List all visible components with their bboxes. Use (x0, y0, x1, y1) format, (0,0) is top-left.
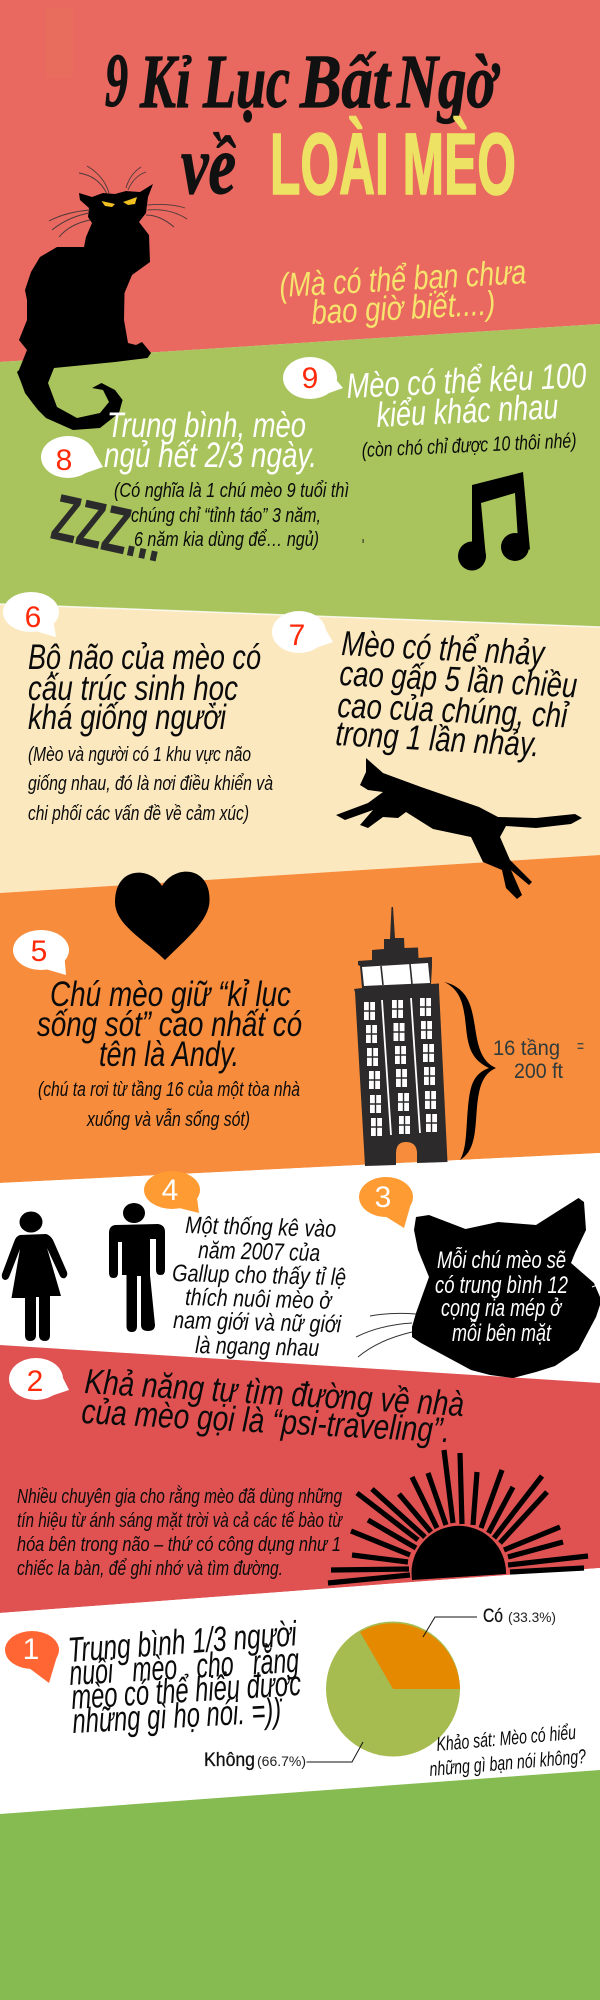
fact 4 text: thích nuôi mèo ở (185, 1284, 334, 1315)
fact 2 paragraph: Nhiều chuyên gia cho rằng mèo đã dùng những (17, 1485, 342, 1508)
fact 6 note: chi phối các vấn đề về cảm xúc) (28, 802, 249, 825)
subtitle (278, 253, 527, 332)
panel: fact 5 (13, 872, 584, 1166)
fact 6 note (28, 743, 273, 825)
fact 3 text: cọng ria mép ở (441, 1295, 563, 1322)
survey caption (429, 1722, 587, 1781)
fact 2 heading: Khả năng tự tìm đường về nhà (84, 1362, 465, 1424)
fact 6 heading: khá giống người (28, 698, 227, 737)
fact 2 heading: của mèo gọi là “psi-traveling”. (81, 1392, 451, 1450)
fact 7 heading: Mèo có thể nhảy (341, 624, 547, 673)
bubble 7: 7 (289, 619, 305, 652)
fact 7 heading (335, 624, 578, 764)
fact 5 heading: Chú mèo giữ “kỉ lục (50, 975, 291, 1014)
fact 4 text: nam giới và nữ giới (173, 1307, 342, 1338)
subtitle: (Mà có thể bạn chưa (278, 253, 527, 305)
floors label (493, 1036, 584, 1083)
panel: fact 4 (2, 1171, 346, 1362)
fact 5 note: (chú ta rơi từ tầng 16 của một tòa nhà (38, 1078, 300, 1101)
title: Ngờ (396, 40, 500, 124)
fact 2 paragraph: chiếc la bàn, để ghi nhớ và tìm đường. (17, 1557, 283, 1580)
title: 9 (105, 39, 128, 123)
bubble 5: 5 (31, 935, 47, 968)
bubble 8 (41, 436, 103, 478)
fact 2 heading (81, 1362, 465, 1450)
title (105, 39, 516, 213)
pie label: yes: Có (483, 1606, 503, 1627)
bubble 7 (272, 611, 333, 653)
fact 8 note: (Có nghĩa là 1 chú mèo 9 tuổi thì (114, 479, 349, 502)
bubble 1: 1 (23, 1633, 39, 1666)
title: Lục (202, 40, 290, 124)
icon: woman (2, 1212, 67, 1341)
bubble 1 (5, 1631, 59, 1683)
icon: building (354, 907, 448, 1166)
fact 2 paragraph (17, 1485, 343, 1580)
bubble 2 (9, 1358, 69, 1400)
floors label: 200 ft (514, 1060, 563, 1083)
panel: fact 2 (9, 1358, 588, 1583)
pie label: no: Không (204, 1750, 255, 1771)
fact 5 heading: tên là Andy. (99, 1035, 239, 1074)
fact 3 text (435, 1246, 568, 1347)
icon: ZZZ: ZZZ... (46, 479, 171, 576)
fact 7 heading: trong 1 lần nhảy. (335, 714, 540, 764)
panel: fact 9 (283, 356, 588, 570)
fact 1 text (67, 1614, 302, 1741)
fact 1 text: nuôi mèo cho rằng (68, 1641, 300, 1693)
bubble 6 (3, 592, 59, 637)
fact 9 heading (346, 356, 588, 435)
panel: fact 8 (41, 406, 349, 576)
icon: sun (328, 1450, 588, 1583)
fact 1 text: Trung bình 1/3 người (67, 1614, 299, 1670)
fact 6 heading (28, 638, 261, 737)
bubble 4: 4 (162, 1174, 178, 1207)
panel: fact 6 (3, 592, 273, 825)
fact 8 note: chúng chỉ “tỉnh táo” 3 năm, (131, 504, 321, 527)
pie label: no (204, 1750, 306, 1771)
fact 8 heading (104, 406, 317, 475)
fact 6 note: (Mèo và người có 1 khu vực não (28, 743, 251, 766)
fact 8 heading: ngủ hết 2/3 ngày. (104, 436, 317, 475)
bubble 8: 8 (56, 444, 72, 477)
pie label: no: (66.7%) (257, 1753, 306, 1769)
panel: fact 3 (356, 1177, 600, 1378)
fact 3 text: mỗi bên mặt (452, 1319, 552, 1347)
fact 8 note: 6 năm kia dùng để… ngủ) (134, 528, 319, 551)
bubble 9: 9 (302, 362, 318, 395)
icon: jumping cat (336, 758, 582, 899)
bubble 4 (144, 1171, 200, 1213)
pie label: yes: (33.3%) (508, 1609, 556, 1625)
pie label: yes (483, 1606, 556, 1627)
icon: music note (362, 472, 530, 570)
fact 1 text: mèo có thể hiểu được (70, 1664, 302, 1717)
bubble 3: 3 (375, 1181, 391, 1214)
fact 5 heading: sống sót” cao nhất có (37, 1005, 302, 1044)
fact 4 text: Một thống kê vào (185, 1212, 336, 1243)
icon: man (109, 1203, 165, 1332)
subtitle: bao giờ biết....) (310, 284, 496, 332)
title: Kỉ (139, 40, 192, 124)
fact 6 heading: cấu trúc sinh học (28, 669, 238, 708)
title: Bất (299, 40, 392, 124)
bubble 9 (283, 357, 343, 399)
fact 2 paragraph: hóa bên trong não – thứ có công dụng như 1 (17, 1533, 341, 1556)
fact 6 heading: Bộ não của mèo có (28, 638, 261, 677)
title: về (181, 119, 236, 212)
fact 4 text: là ngang nhau (195, 1332, 319, 1362)
fact 8 heading: Trung bình, mèo (107, 406, 306, 445)
fact 4 text (172, 1212, 346, 1362)
fact 4 text: năm 2007 của (198, 1237, 320, 1267)
fact 8 note (114, 479, 349, 551)
pie chart (306, 1617, 477, 1762)
bubble 6: 6 (25, 601, 41, 634)
fact 5 note: xuống và vẫn sống sót) (86, 1108, 250, 1131)
bubble 5 (13, 930, 69, 975)
fact 5 heading (37, 975, 302, 1074)
brace (444, 982, 496, 1160)
icon: heart (115, 872, 210, 960)
bubble 2: 2 (27, 1365, 43, 1398)
bubble 3 (359, 1177, 413, 1228)
fact 2 paragraph: tín hiệu từ ánh sáng mặt trời và cả các tế bào từ (17, 1509, 343, 1532)
icon: black cat (17, 166, 187, 430)
fact 1 text: những gì họ nói. =)) (71, 1691, 282, 1741)
panel: fact 1 (5, 1606, 587, 1781)
fact 5 note (38, 1078, 300, 1131)
floors label: 16 tầng (493, 1037, 560, 1060)
floors label: = (577, 1036, 584, 1056)
panel: fact 7 (272, 611, 578, 764)
fact 4 text: Gallup cho thấy tỉ lệ (172, 1260, 346, 1291)
fact 6 note: giống nhau, đó là nơi điều khiển và (28, 772, 273, 795)
icon: cat head (356, 1198, 600, 1378)
